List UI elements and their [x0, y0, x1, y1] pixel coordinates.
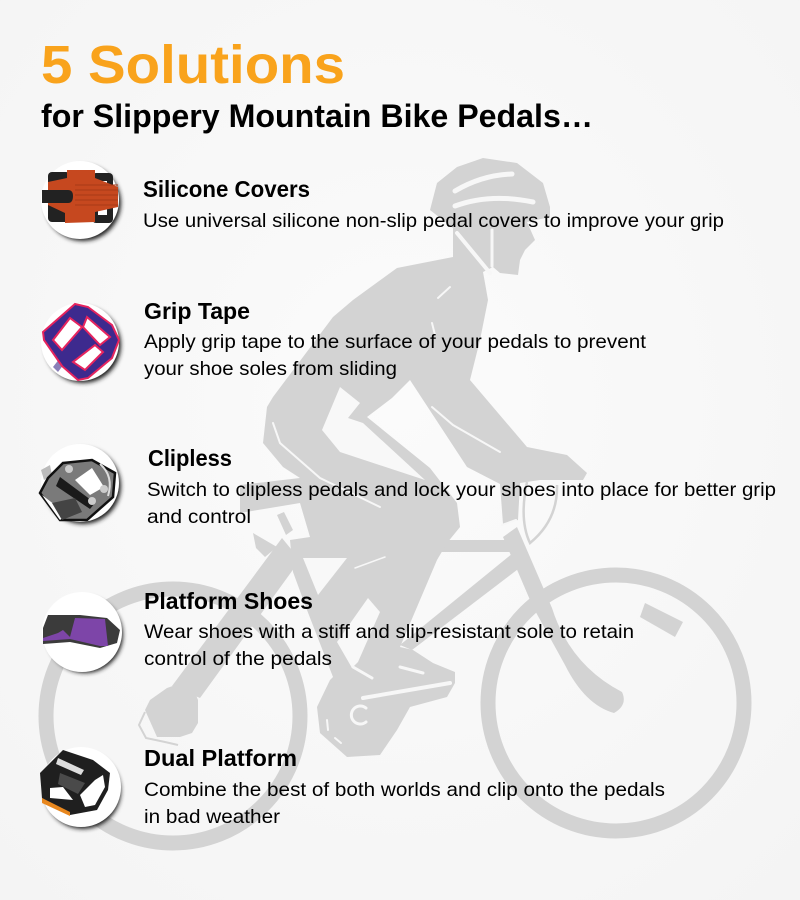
heading: Platform Shoes [144, 588, 313, 614]
heading: Grip Tape [144, 298, 250, 324]
description line 1: Apply grip tape to the surface of your pedals to prevent [144, 331, 647, 353]
title line 1: 5 Solutions [41, 35, 345, 95]
icon: dual platform pedal [40, 747, 121, 829]
brake cable [524, 482, 557, 543]
item: Clipless [40, 444, 776, 528]
icon: shoe sole [42, 592, 123, 673]
title [41, 35, 593, 134]
description line 2: in bad weather [144, 806, 281, 828]
helmet vents, straps and clothing highlights [273, 174, 533, 743]
icon: clipless pedal [40, 444, 121, 524]
heading: Clipless [148, 445, 232, 471]
description line 1: Combine the best of both worlds and clip onto the pedals [144, 779, 665, 801]
icon: silicone pedal cover [41, 161, 121, 241]
item: Platform Shoes [42, 588, 634, 673]
cut-outs between thigh and arm [303, 387, 425, 668]
cassette outline [139, 712, 178, 745]
item: Grip Tape [41, 298, 647, 383]
rear wheel [46, 589, 300, 843]
item: Silicone Covers [41, 161, 724, 241]
icon: purple flat pedal [41, 303, 121, 383]
description line 1: Switch to clipless pedals and lock your shoes into place for better grip [147, 479, 776, 501]
rear cassette [145, 680, 198, 737]
front wheel [488, 575, 744, 831]
bicycle frame [172, 527, 683, 713]
rider body [240, 158, 587, 757]
description line 2: your shoe soles from sliding [144, 358, 397, 380]
title line 2: for Slippery Mountain Bike Pedals… [41, 98, 593, 134]
heading: Silicone Covers [143, 176, 310, 202]
background illustration: cyclist silhouette [46, 158, 744, 843]
item: Dual Platform [40, 745, 665, 829]
heading: Dual Platform [144, 745, 297, 771]
description line 2: control of the pedals [144, 648, 332, 670]
saddle and seat post [253, 512, 293, 557]
description line 1: Wear shoes with a stiff and slip-resistant sole to retain [144, 621, 634, 643]
description line 2: and control [147, 506, 251, 528]
description: Use universal silicone non-slip pedal covers to improve your grip [143, 210, 724, 232]
